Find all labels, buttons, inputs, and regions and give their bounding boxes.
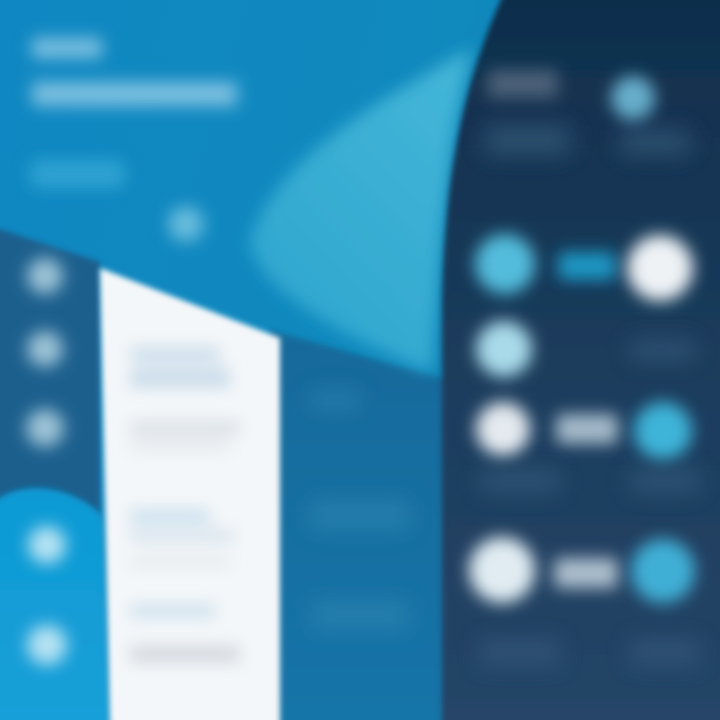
icon: top right dot <box>611 76 655 120</box>
text block 3 <box>130 605 240 663</box>
text: dark panel top lines <box>485 125 690 155</box>
panel: dark left sidebar <box>0 226 100 520</box>
text: middle column lines <box>310 390 410 630</box>
flow row 1 <box>475 234 693 301</box>
panel: middle blue column <box>270 330 450 720</box>
icon: sidebar 3 <box>26 409 64 447</box>
panel: dark navy right side <box>442 0 720 720</box>
node: cyan circle <box>634 402 692 460</box>
flow row 3 <box>476 402 692 460</box>
connector: cyan bar <box>558 252 616 280</box>
panel: white content card <box>100 268 280 720</box>
icon: sidebar 2 <box>27 331 63 367</box>
icon: small top badge <box>168 206 204 242</box>
node: cyan circle <box>475 234 535 294</box>
text block 1 <box>130 348 240 450</box>
icon: lower sidebar 2 <box>27 625 67 665</box>
connector: grey bar <box>556 414 618 444</box>
node: white circle <box>627 235 693 301</box>
icon: sidebar 1 <box>27 258 63 294</box>
shape: light cyan wedge <box>250 48 472 372</box>
text block 2 <box>130 510 235 566</box>
icon: lower sidebar 1 <box>28 526 66 564</box>
flow row 4 <box>469 537 695 603</box>
connector: grey bar <box>554 558 618 588</box>
panel: bright blue lower sidebar <box>0 488 110 720</box>
node: cyan circle <box>631 539 695 603</box>
flow row 2: node <box>476 321 532 377</box>
lower sidebar icons <box>27 526 67 665</box>
header: dark panel top left block <box>488 70 558 98</box>
heading: blurred title <box>32 38 237 106</box>
node: white circle <box>476 402 530 456</box>
node: white circle <box>469 537 535 603</box>
text: dark panel captions <box>480 340 700 665</box>
button: subtitle pill <box>30 160 125 188</box>
sidebar icons <box>26 258 64 447</box>
